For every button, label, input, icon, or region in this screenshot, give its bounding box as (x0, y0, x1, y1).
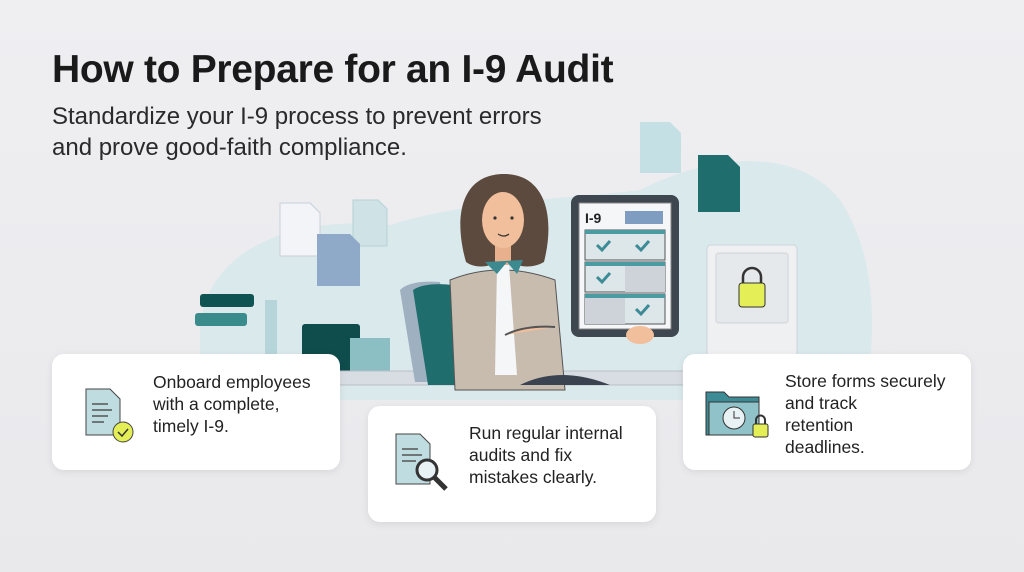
tablet I-9 (571, 195, 679, 344)
card: storage: and track (785, 393, 857, 413)
card: audits: mistakes clearly. (469, 467, 597, 487)
card: audits: audits and fix (469, 445, 572, 465)
card: onboard (52, 354, 340, 470)
subtitle: and prove good-faith compliance. (52, 134, 407, 161)
icon: document check (86, 388, 134, 442)
card: storage: Store forms securely (785, 371, 945, 391)
tablet I-9: I-9 (585, 210, 602, 226)
card: storage (683, 354, 971, 470)
card: onboard: timely I-9. (153, 416, 229, 436)
card: onboard: Onboard employees (153, 372, 311, 392)
cabinet (707, 245, 797, 365)
person (450, 174, 610, 390)
subtitle (52, 103, 542, 161)
icon: folder clock lock (706, 392, 768, 438)
card: audits: Run regular internal (469, 423, 623, 443)
title: How to Prepare for an I-9 Audit (52, 48, 613, 91)
shelf items left (195, 294, 390, 374)
chair (400, 282, 460, 382)
icon: magnifier document (396, 434, 448, 491)
card: storage: deadlines. (785, 437, 865, 457)
desk (260, 371, 710, 385)
subtitle: Standardize your I-9 process to prevent errors (52, 103, 542, 130)
card: audits (368, 406, 656, 522)
floating docs (280, 122, 740, 286)
blob background (200, 161, 872, 400)
card: storage: retention (785, 415, 853, 435)
card: onboard: with a complete, (153, 394, 279, 414)
